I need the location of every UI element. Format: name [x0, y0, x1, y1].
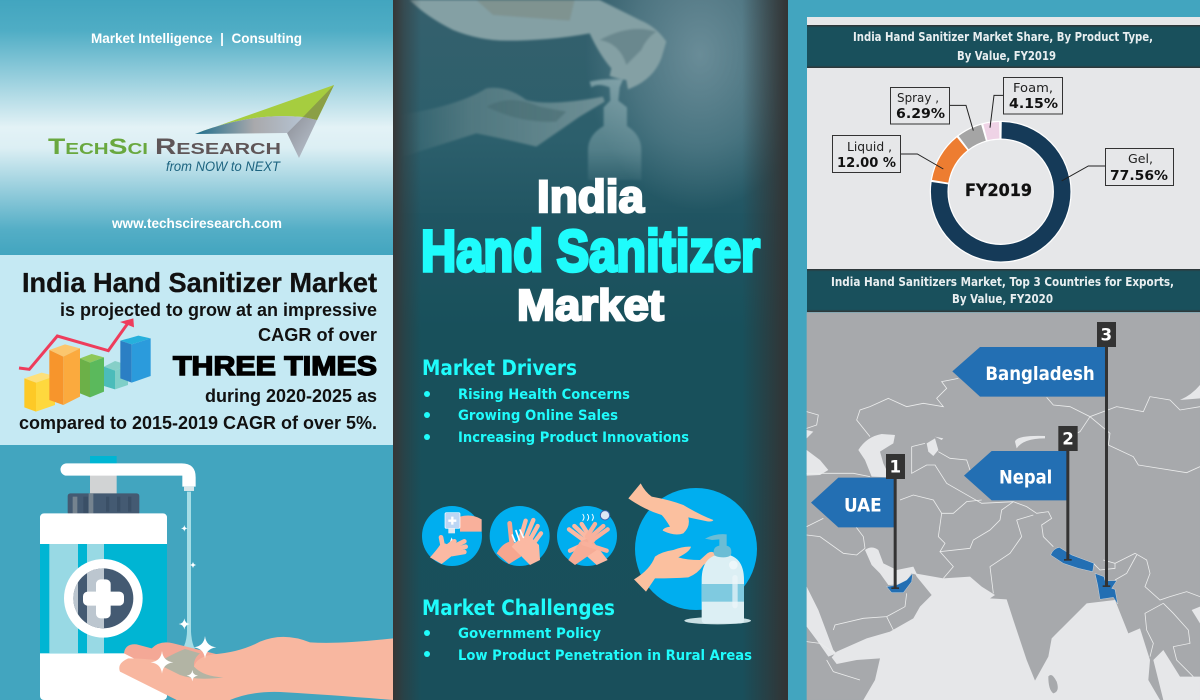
flag: Nepal: [964, 426, 1078, 561]
label: Liquid: [832, 136, 900, 172]
market drivers: Market Drivers: [422, 356, 577, 380]
leader lines: [901, 95, 1105, 181]
market drivers: [422, 356, 689, 446]
panel: logo header: [0, 0, 393, 255]
panel: sanitizer bottle illustration: [40, 456, 393, 700]
photo: hands and bottle: [398, 0, 666, 180]
label: Spray: 6.29%: [896, 107, 945, 122]
market drivers: Rising Health Concerns: [458, 387, 630, 403]
flag: Bangladesh: Bangladesh: [985, 364, 1095, 385]
label: Liquid: Liquid ,: [847, 139, 892, 154]
label: Liquid: 12.00 %: [837, 156, 896, 171]
icon: bar chart with arrow: [19, 318, 151, 412]
text line: compared to 2015-2019 CAGR of over 5%.: [19, 413, 377, 433]
icon: bottle: [40, 456, 196, 700]
tagline: Market Intelligence | Consulting: [91, 30, 302, 46]
map header: By Value, FY2020: [952, 291, 1053, 306]
borders: [807, 378, 1200, 680]
label: Gel: [1106, 148, 1174, 186]
map: [807, 312, 1200, 700]
logo: from NOW to NEXT: [166, 158, 281, 174]
panel: export map: [807, 269, 1200, 700]
logo: TECH S CI: [48, 134, 148, 159]
heading: India Hand Sanitizer Market: [22, 267, 377, 298]
flag: UAE: 1: [890, 458, 901, 477]
panel: center column: [393, 0, 815, 700]
title: India: [537, 171, 645, 222]
seas and lakes: [807, 385, 1200, 700]
handwash step icons: [422, 506, 617, 566]
market drivers: Growing Online Sales: [458, 408, 618, 424]
label: Gel: Gel,: [1128, 151, 1153, 166]
label: Spray: [890, 88, 950, 124]
icon: step two: [497, 520, 541, 565]
flag: Bangladesh: 3: [1101, 326, 1112, 345]
Sri Lanka: [1048, 675, 1058, 693]
label: Spray: Spray ,: [897, 90, 939, 105]
panel: right background: [788, 0, 1200, 700]
title: Hand Sanitizer: [421, 219, 760, 284]
flag: Bangladesh: [952, 322, 1116, 587]
icon: sanitizer stream: [183, 492, 195, 649]
panel: donut chart: [807, 17, 1200, 269]
highlighted countries: [887, 547, 1118, 604]
chart header: [807, 25, 1200, 68]
icon: step one: [430, 513, 482, 564]
icon: open hand: [119, 637, 393, 700]
donut: FY2019: [965, 181, 1032, 201]
map header: [807, 269, 1200, 312]
title: [421, 171, 760, 330]
chart header: By Value, FY2019: [957, 49, 1056, 63]
panel: growth statement: [0, 255, 393, 445]
title: Market: [517, 281, 664, 330]
website: www.techsciresearch.com: [111, 215, 282, 231]
market challenges: Low Product Penetration in Rural Areas: [458, 648, 752, 664]
emphasis: THREE TIMES: [173, 351, 377, 381]
icon: step three: [568, 511, 610, 565]
text line: is projected to grow at an impressive: [60, 300, 377, 320]
market drivers: Increasing Product Innovations: [458, 430, 689, 446]
label: Gel: 77.56%: [1110, 169, 1168, 184]
chart header: India Hand Sanitizer Market Share, By Product Type,: [853, 30, 1153, 44]
market challenges: Government Policy: [458, 626, 601, 642]
label: Foam: [1004, 78, 1062, 114]
flag: UAE: [811, 454, 905, 589]
label: Foam: 4.15%: [1009, 97, 1058, 112]
label: Foam: Foam,: [1013, 80, 1053, 95]
flag: Nepal: Nepal: [999, 468, 1052, 489]
logo: R ESEARCH: [155, 134, 281, 159]
icon: hands with pump bottle: [628, 483, 757, 624]
market challenges: [422, 596, 752, 664]
logo: [48, 85, 334, 174]
icon: sparkles: [151, 525, 216, 681]
market challenges: Market Challenges: [422, 596, 615, 620]
donut: [939, 130, 1062, 253]
text line: CAGR of over: [258, 325, 377, 345]
flag: Nepal: 2: [1062, 430, 1074, 449]
text line: during 2020-2025 as: [205, 386, 377, 406]
flag: UAE: UAE: [844, 495, 882, 516]
